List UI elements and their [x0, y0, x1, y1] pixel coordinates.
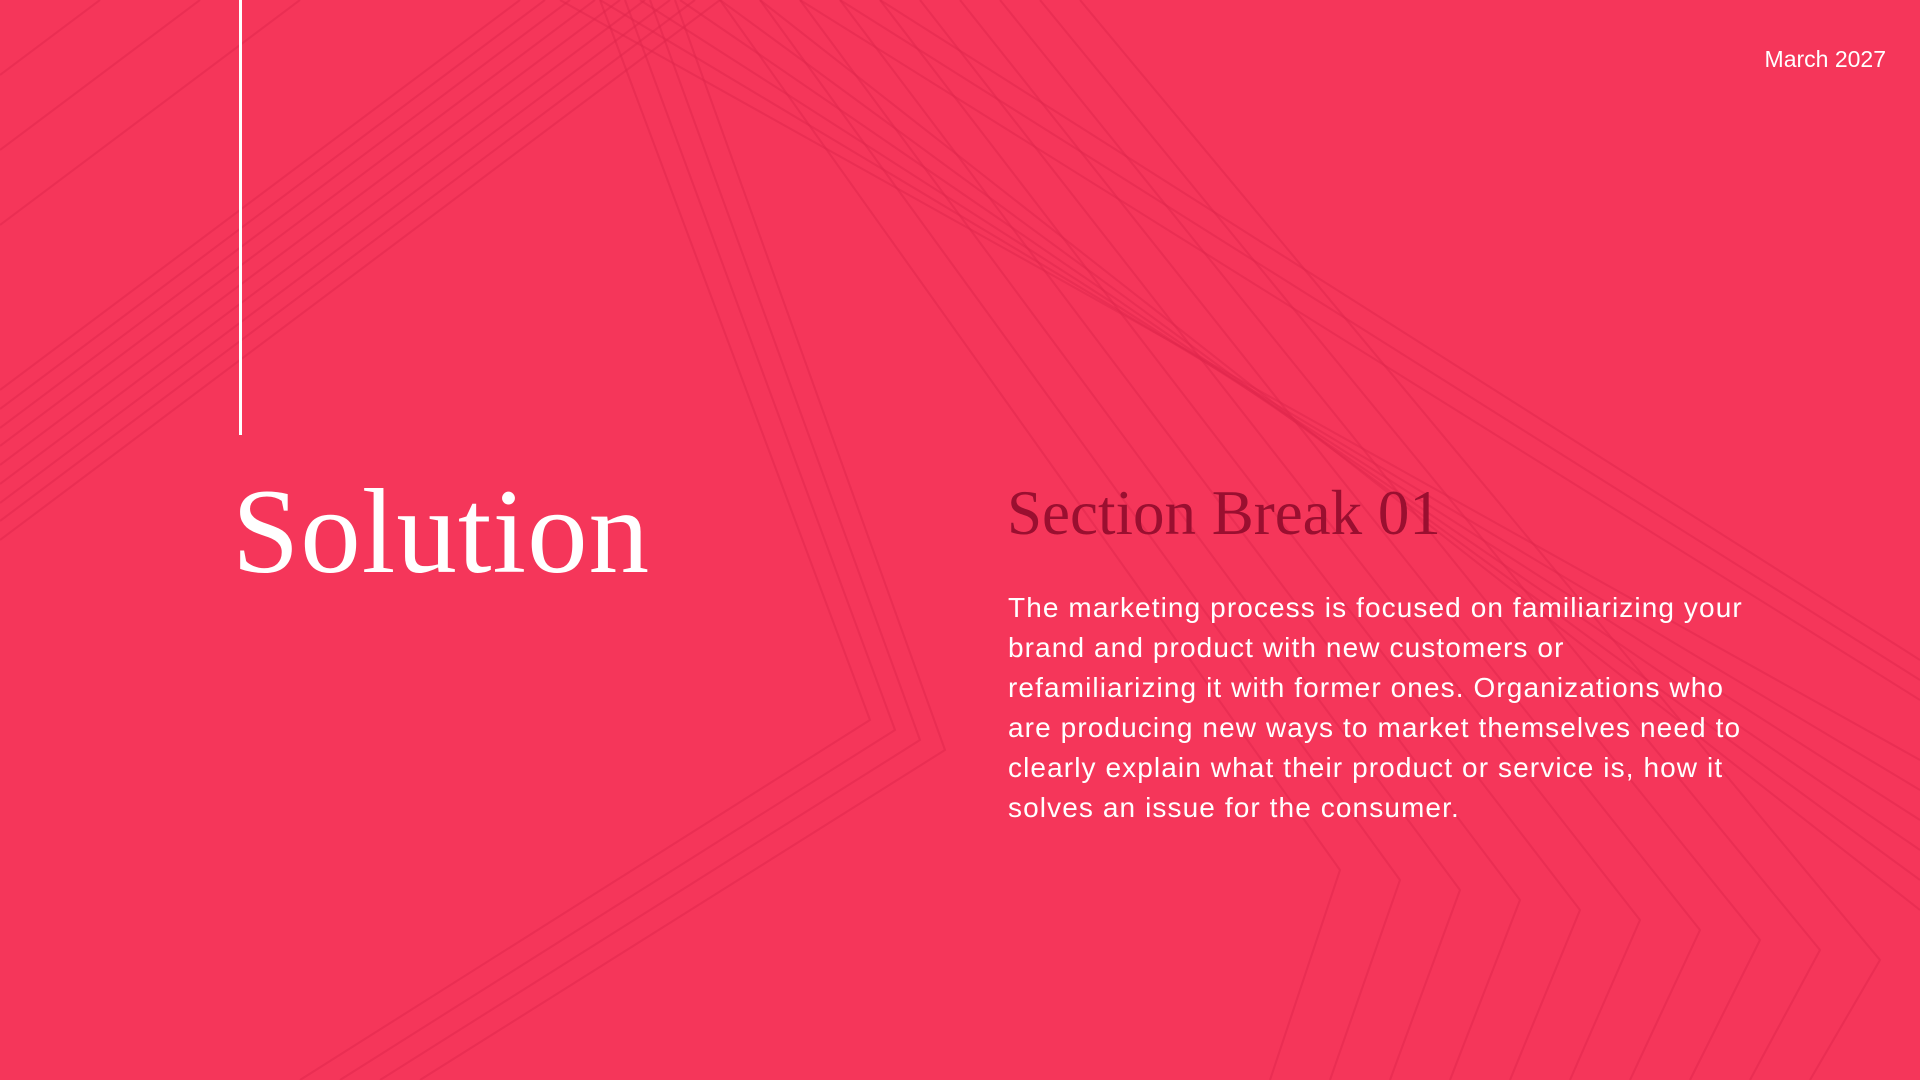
subtitle: Section Break 01: Section Break 01	[1007, 478, 1441, 548]
title: Solution: Solution	[232, 465, 650, 599]
body text: are producing new ways to market themselves need to	[1008, 712, 1741, 743]
body text: refamiliarizing it with former ones. Organizations who	[1008, 672, 1724, 703]
body text	[1008, 592, 1743, 823]
date: March 2027	[1765, 46, 1886, 72]
vertical accent line	[239, 0, 242, 435]
body text: clearly explain what their product or service is, how it	[1008, 752, 1723, 783]
body text: The marketing process is focused on familiarizing your	[1008, 592, 1743, 623]
body text: solves an issue for the consumer.	[1008, 792, 1460, 823]
body text: brand and product with new customers or	[1008, 632, 1564, 663]
